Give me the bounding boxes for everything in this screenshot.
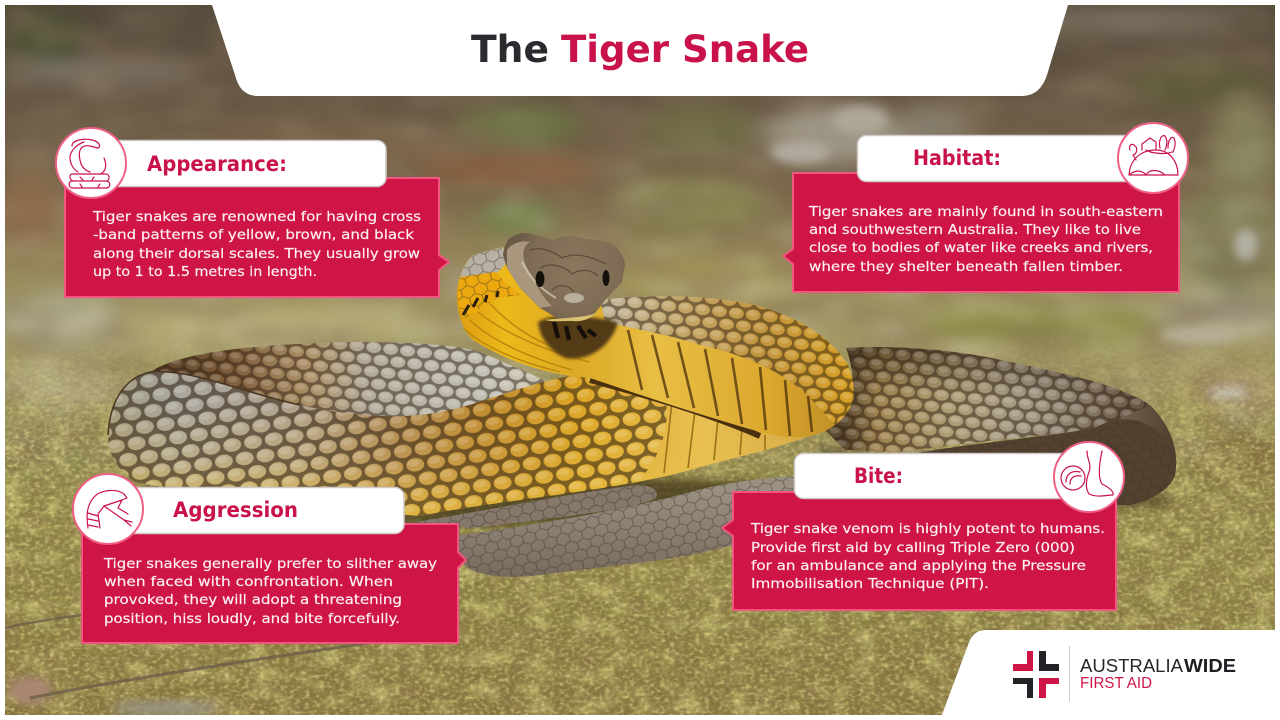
text block: appearance: up to 1 to 1.5 metres in length. [93,264,317,280]
tail [415,476,795,577]
logo wordmark: FIRST AID [1080,675,1152,692]
text block: aggression: when faced with confrontation. When [104,574,393,590]
logo wordmark [1080,656,1236,692]
text block: habitat [808,204,1163,275]
text block: bite [750,521,1105,592]
logo wordmark: AUSTRALIA [1080,656,1183,676]
icon: coiled snake [56,128,126,198]
icon: striking snake head [73,474,143,544]
text block: aggression: position, hiss loudly, and bite forcefully. [104,611,400,627]
text block: habitat: Tiger snakes are mainly found in south-eastern [808,204,1163,220]
panel: habitat [783,123,1188,292]
right coil [825,347,1176,505]
text block: habitat: and southwestern Australia. They like to live [809,222,1141,238]
logo panel [940,630,1280,720]
rear coil [152,342,546,416]
icon: logo cross [1013,651,1059,698]
text block: appearance: -band patterns of yellow, brown, and black [93,227,414,243]
text block: appearance: along their dorsal scales. They usually grow [93,246,420,262]
text block: appearance [92,209,421,280]
text block: bite: for an ambulance and applying the Pressure [751,558,1086,574]
snake [108,233,1176,577]
head [503,233,625,321]
icon: habitat landscape [1118,123,1188,193]
text block: bite: Tiger snake venom is highly potent to humans. [750,521,1105,537]
panel: aggression [73,474,466,643]
heading: habitat: Habitat: [913,146,1001,170]
logo wordmark: WIDE [1184,656,1236,676]
text block: bite: Provide first aid by calling Triple Zero (000) [751,540,1075,556]
heading: aggression: Aggression [173,498,298,522]
panel: appearance [56,128,449,297]
text block: aggression [103,556,437,627]
text block: bite: Immobilisation Technique (PIT). [751,576,989,592]
title accent: Tiger Snake [561,28,809,71]
text block: aggression: provoked, they will adopt a threatening [104,592,402,608]
title banner [205,0,1075,96]
heading: bite: Bite: [854,464,903,488]
heading: appearance: Appearance: [147,152,287,176]
text block: appearance: Tiger snakes are renowned for having cross [92,209,421,225]
icon: bitten foot [1054,442,1124,512]
text block: habitat: where they shelter beneath fallen timber. [809,259,1123,275]
front coil [108,372,830,516]
neck arch [457,247,854,437]
text block: aggression: Tiger snakes generally prefer to slither away [103,556,437,572]
title: The [471,28,549,71]
icon: snake eyes [536,270,610,287]
text block: habitat: close to bodies of water like creeks and rivers, [809,240,1153,256]
panel: bite [722,442,1124,610]
